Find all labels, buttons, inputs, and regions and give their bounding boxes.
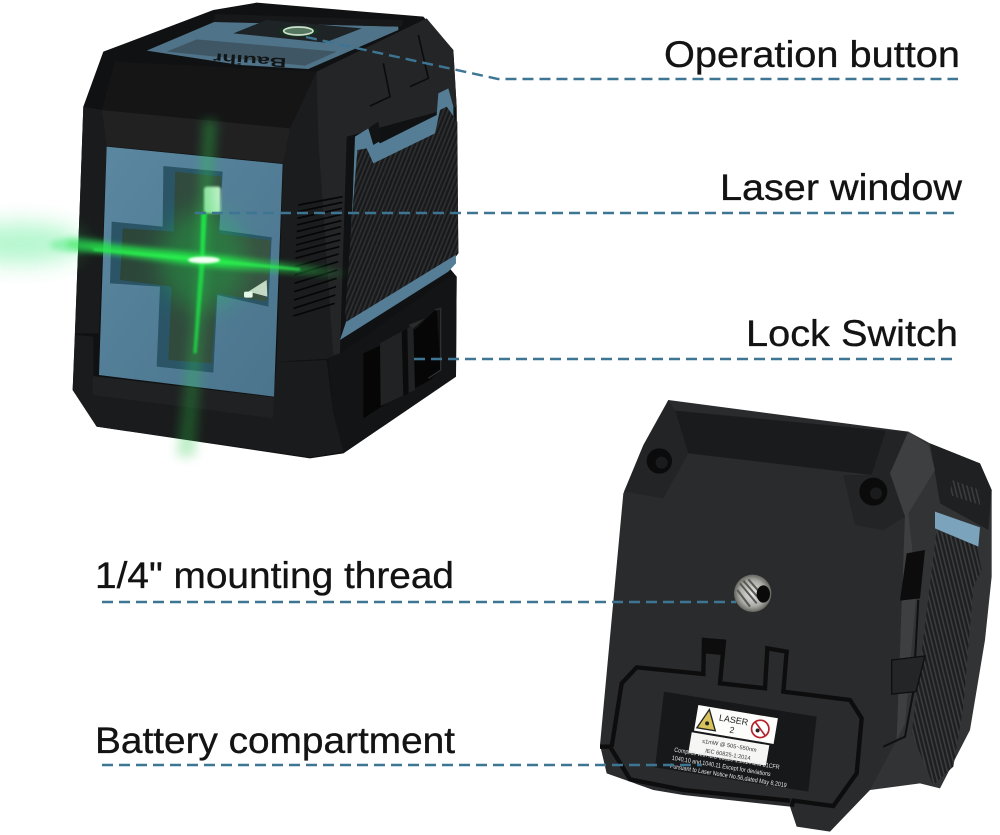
lower front band: [73, 335, 343, 457]
laser level front view: [0, 3, 458, 458]
compliance text: Complies with IEC 60825-1:2014 and 21CFR: [674, 747, 780, 771]
vent ribs: [293, 197, 343, 316]
leader: operation button: [306, 37, 958, 79]
laser class number: 2: [729, 725, 735, 735]
label: mounting thread: 1/4" mounting thread: [95, 555, 454, 596]
compliance text: Pursuant to Laser Notice No.56,dated May 8,2019: [669, 763, 788, 789]
device silhouette: [73, 3, 458, 458]
label: lock switch: Lock Switch: [746, 313, 958, 354]
top band: [675, 411, 886, 475]
battery cover outline: [600, 640, 862, 807]
window reflections: [204, 187, 267, 298]
side edge line: [883, 600, 918, 747]
left screw: [647, 448, 672, 474]
back face: [600, 400, 908, 832]
upper front band: [102, 110, 290, 163]
leader lines: [102, 37, 960, 765]
side body: [870, 432, 992, 790]
label background: [694, 705, 778, 744]
right screw: [859, 478, 887, 506]
lock switch: [363, 308, 441, 418]
label: laser window: Laser window: [720, 167, 962, 208]
leader: laser window: [195, 212, 960, 214]
brand name: Bauihr: [213, 50, 287, 70]
mounting thread: [734, 575, 771, 612]
side clip: [892, 656, 925, 694]
side ribbed grip: [912, 530, 982, 785]
warning triangle: [697, 708, 719, 731]
top rear lip: [213, 14, 403, 27]
side top vent: [950, 480, 980, 505]
left front edge: [75, 107, 107, 333]
laser green glow: [0, 120, 350, 457]
corner shoulder left: [624, 400, 688, 498]
battery cover tabs: [703, 640, 724, 655]
right chamfer: [890, 432, 935, 740]
laser class text: LASER: [718, 713, 750, 727]
side ribbed grip: [345, 107, 458, 322]
lower right block: [328, 277, 457, 453]
brand plate: [167, 39, 337, 66]
label specification: [688, 732, 769, 766]
leader: battery compartment: [102, 764, 702, 766]
lower front inner strip: [93, 376, 274, 418]
operation button: [279, 26, 318, 37]
right side body: [317, 18, 457, 355]
labels: [95, 34, 962, 761]
spec line two: IEC 60825-1:2014: [705, 748, 751, 762]
side slot: [900, 550, 925, 601]
side blue trim: [935, 512, 980, 547]
right front edge: [277, 72, 340, 362]
side dark shell: [930, 443, 992, 530]
laser safety label: [688, 705, 778, 766]
laser window cross frame: [110, 166, 272, 373]
label: battery compartment: Battery compartment: [95, 720, 456, 761]
spec line one: ≤1mW @ 505~550nm: [702, 739, 757, 754]
leader: mounting thread: [102, 601, 736, 603]
front blue panel: [99, 147, 283, 397]
top face recess: [147, 22, 398, 69]
operation panel: [233, 20, 362, 43]
laser warning plate: [655, 692, 817, 792]
side notch: [368, 122, 382, 145]
label: operation button: Operation button: [664, 34, 960, 75]
no direct view icon: [750, 719, 770, 739]
corner shoulder right: [843, 431, 908, 530]
side notch lines: [370, 35, 428, 106]
laser window: [120, 172, 271, 363]
top chamfer: [102, 62, 317, 128]
leader: lock switch: [414, 358, 958, 360]
side blue trim: [340, 88, 456, 340]
laser level back view: [600, 400, 992, 832]
compliance text: 1040,10 and 1040.11 Except for deviations: [671, 755, 771, 778]
compliance text: [669, 746, 790, 789]
